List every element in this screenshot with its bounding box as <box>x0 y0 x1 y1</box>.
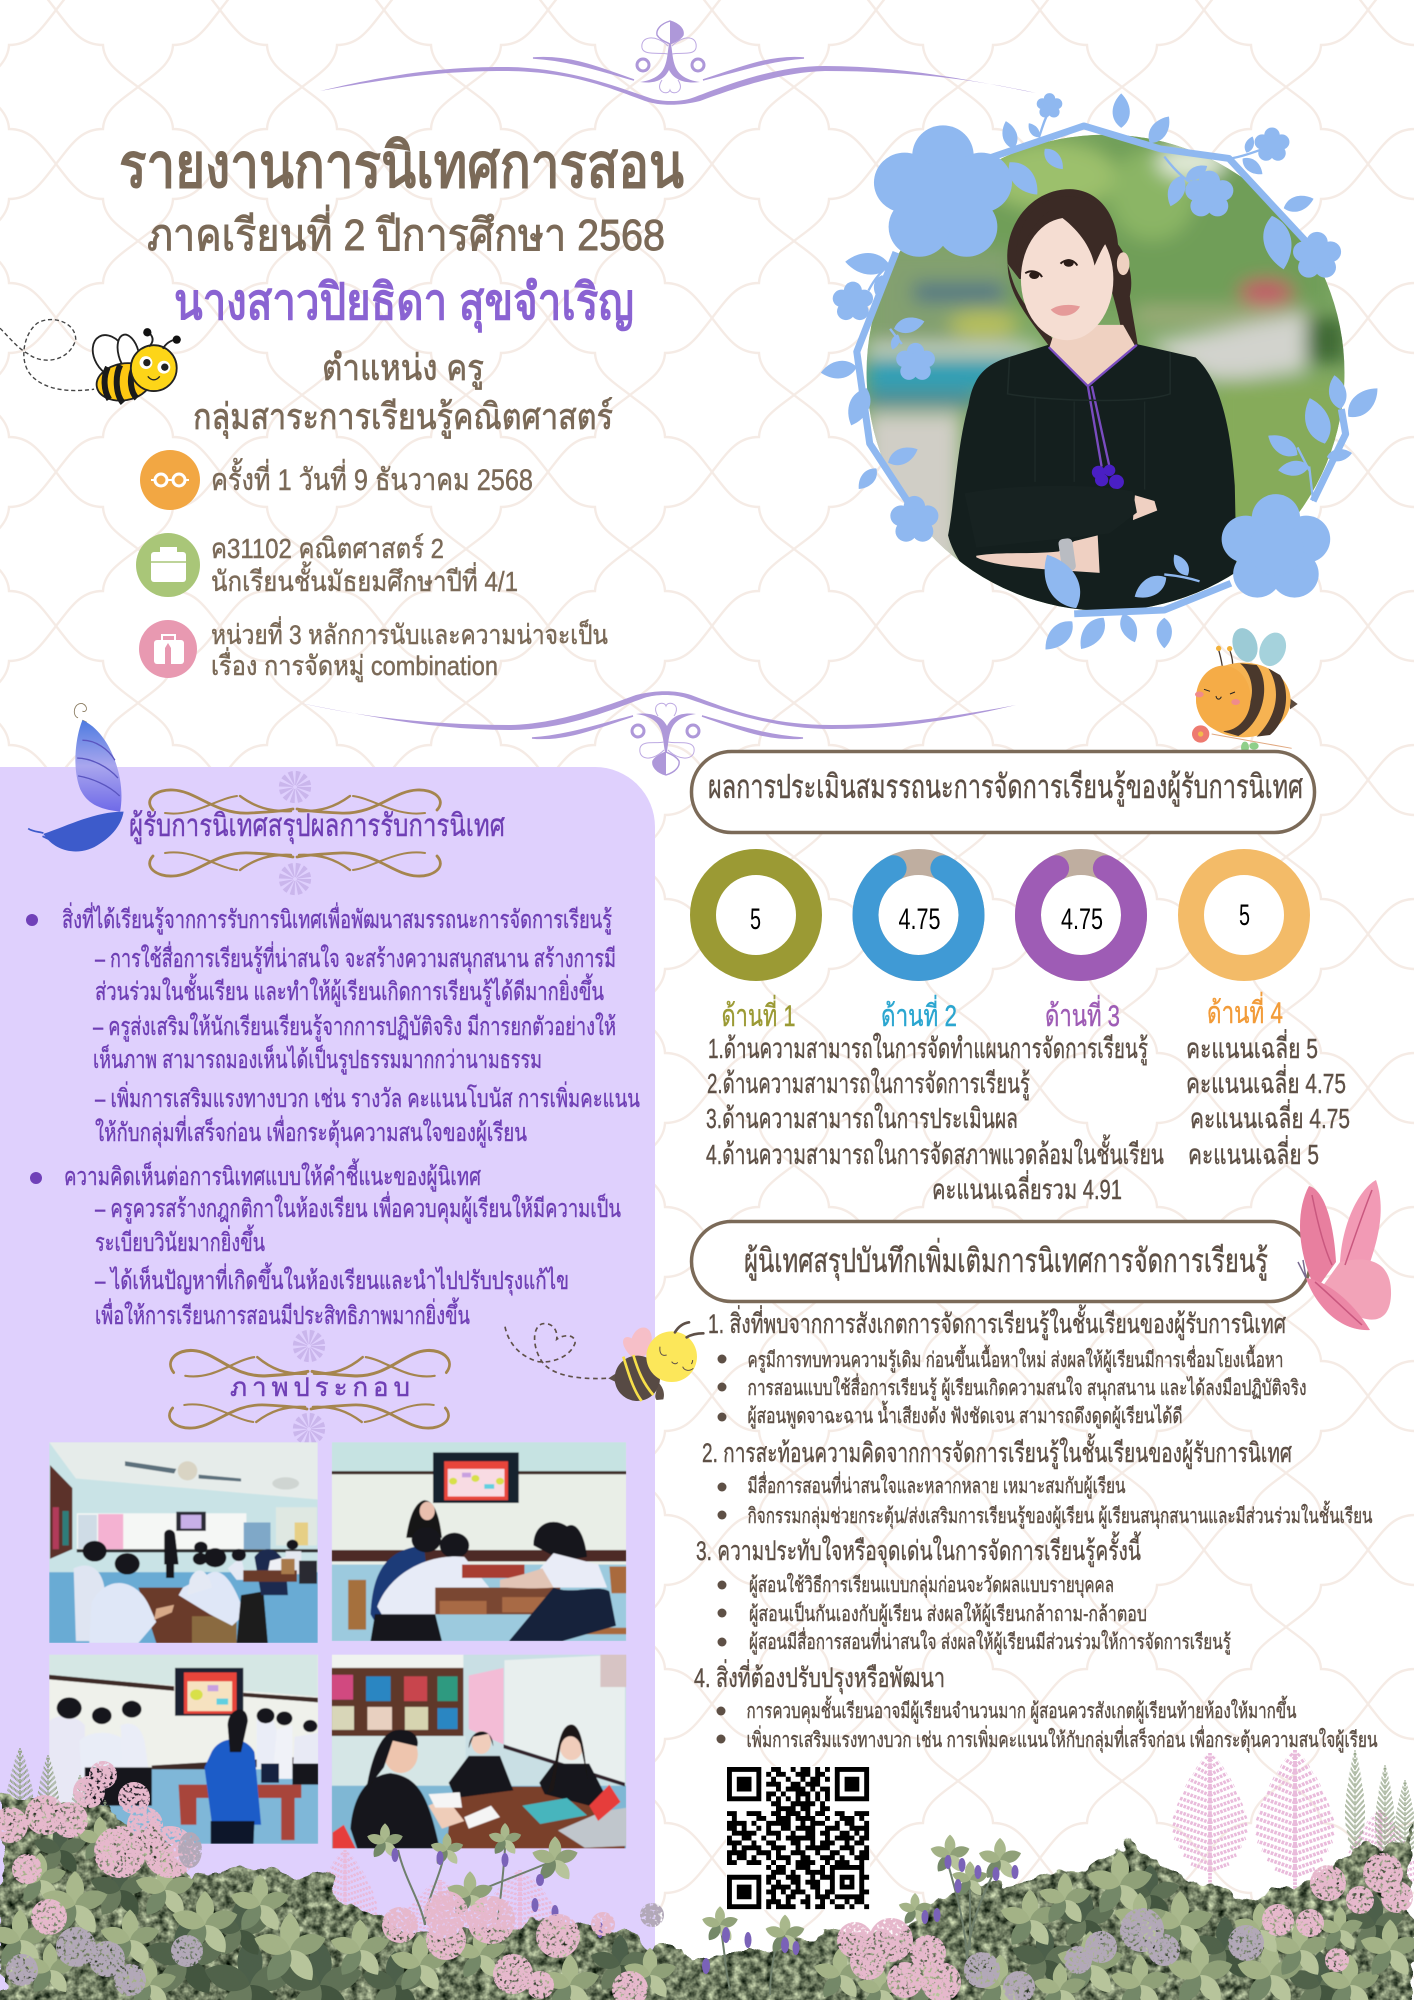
donut 3: 4.75 <box>1061 903 1103 936</box>
yellow bee <box>608 1322 703 1407</box>
photo 3: students at board <box>49 1654 318 1844</box>
note group 1 <box>708 1304 1306 1429</box>
top ornament <box>320 21 1036 105</box>
unit details: หน่วยที่ 3 หลักการนับและความน่าจะเป็น <box>211 616 608 650</box>
photo heading ornament top <box>170 1337 450 1376</box>
heading ornament top <box>150 778 440 814</box>
pink flower clusters <box>0 1761 1413 2000</box>
score list: 4.ด้านความสามารถในการจัดสภาพแวดล้อมในชั้นเรียน <box>706 1134 1164 1170</box>
donut labels: ด้านที่ 4 <box>1207 992 1283 1030</box>
score list: 3.ด้านความสามารถในการประเมินผล <box>706 1102 1018 1134</box>
bullet: supervision opinions: ความคิดเห็นต่อการนิเทศแบบให้คำชี้แนะของผู้นิเทศ <box>64 1158 481 1192</box>
grey flower clusters <box>6 1832 1264 2000</box>
note group 3: ผู้สอนเป็นกันเองกับผู้เรียน ส่งผลให้ผู้เรียนกล้าถาม-กล้าตอบ <box>749 1600 1147 1627</box>
donut 1: 5 <box>750 903 761 936</box>
foliage mass <box>0 1790 1414 2000</box>
bullet: supervision opinions: เพื่อให้การเรียนการสอนมีประสิทธิภาพมากยิ่งขึ้น <box>95 1297 470 1330</box>
score list <box>706 1029 1350 1205</box>
portrait photo with floral frame <box>819 93 1385 656</box>
panel background <box>0 767 655 2000</box>
note group 4: 4. สิ่งที่ต้องปรับปรุงหรือพัฒนา <box>694 1659 945 1695</box>
bullet: learned points: เห็นภาพ สามารถมองเห็นได้เป็นรูปธรรมมากกว่านามธรรม <box>93 1044 542 1075</box>
note group 4 <box>694 1659 1378 1753</box>
score list: คะแนนเฉลี่ย 4.75 <box>1186 1064 1346 1099</box>
score list: 1.ด้านความสามารถในการจัดทำแผนการจัดการเรียนรู้ <box>708 1032 1148 1066</box>
donut 4 <box>1191 862 1297 968</box>
icon: suitcase <box>139 620 197 678</box>
icon: glasses <box>140 450 200 510</box>
score list: คะแนนเฉลี่ย 4.75 <box>1190 1099 1350 1134</box>
astilbe plumes <box>313 1750 1414 1964</box>
bullet: learned points: ส่วนร่วมในชั้นเรียน และทำให้ผู้เรียนเกิดการเรียนรู้ได้ดีมากยิ่งขึ้น <box>95 973 604 1007</box>
portrait photo <box>859 130 1352 620</box>
panel: supervisee summary <box>0 703 655 2000</box>
bullet: learned points: – การใช้สื่อการเรียนรู้ที่น่าสนใจ จะสร้างความสนุกสนาน สร้างการมี <box>95 941 616 974</box>
note group 2 <box>702 1433 1372 1529</box>
donut 4: 5 <box>1239 899 1250 932</box>
panel heading: ผู้รับการนิเทศสรุปผลการรับการนิเทศ <box>129 808 505 845</box>
section: competency results <box>692 752 1350 1205</box>
bullet: learned points <box>26 902 640 1148</box>
pink butterfly <box>1298 1180 1391 1330</box>
course details: ค31102 คณิตศาสตร์ 2 <box>211 533 444 564</box>
bullet: supervision opinions: – ครูควรสร้างกฎกติกาในห้องเรียน เพื่อควบคุมผู้เรียนให้มีความเป็น <box>95 1191 621 1224</box>
photo heading: ภาพประกอบ <box>230 1372 410 1402</box>
donut labels: ด้านที่ 2 <box>881 995 957 1033</box>
unit details: เรื่อง การจัดหมู่ combination <box>211 647 498 682</box>
bottom ornament <box>300 691 1016 775</box>
dark leaf rosettes <box>32 1823 1407 2000</box>
pill heading: notes <box>692 1222 1310 1302</box>
donut labels: ด้านที่ 3 <box>1045 995 1120 1033</box>
heading ornament bottom <box>150 852 440 888</box>
photo gallery <box>49 1442 627 1849</box>
note group 2: มีสื่อการสอนที่น่าสนใจและหลากหลาย เหมาะสมกับผู้เรียน <box>748 1471 1126 1499</box>
visit details list <box>136 450 608 682</box>
note group 3: ผู้สอนใช้วิธีการเรียนแบบกลุ่มก่อนจะวัดผลแบบรายบุคคล <box>749 1573 1114 1598</box>
photo 1: classroom <box>49 1442 318 1643</box>
pale leaf rosettes <box>0 1816 1414 2000</box>
section: supervisor notes <box>692 1222 1378 1753</box>
donut labels <box>722 992 1283 1033</box>
donut 2: 4.75 <box>898 903 940 936</box>
graduate figure <box>948 189 1237 616</box>
floral frame <box>819 93 1385 656</box>
donut 3 <box>1028 862 1134 968</box>
course details <box>211 533 518 597</box>
watercolor bee <box>1192 625 1298 753</box>
note group 3: ผู้สอนมีสื่อการสอนที่น่าสนใจ ส่งผลให้ผู้เรียนมีส่วนร่วมให้การจัดการเรียนรู้ <box>749 1627 1231 1655</box>
pill heading: results <box>692 752 1314 832</box>
donut 1 <box>703 862 809 968</box>
foliage border <box>0 1748 1414 2000</box>
visit date: ครั้งที่ 1 วันที่ 9 ธันวาคม 2568 <box>211 458 533 497</box>
blue butterfly <box>28 703 124 851</box>
note group 3: 3. ความประทับใจหรือจุดเด่นในการจัดการเรียนรู้ครั้งนี้ <box>696 1531 1141 1568</box>
bullet: supervision opinions <box>30 1158 621 1330</box>
score list: คะแนนเฉลี่ย 5 <box>1188 1135 1319 1170</box>
score list: คะแนนเฉลี่ย 5 <box>1186 1029 1318 1064</box>
bullet: supervision opinions: – ได้เห็นปัญหาที่เกิดขึ้นในห้องเรียนและนำไปปรับปรุงแก้ไข <box>95 1262 569 1296</box>
bullet: supervision opinions: ระเบียบวินัยมากยิ่งขึ้น <box>95 1224 265 1257</box>
purple bud stems <box>366 1823 1023 1995</box>
bullet: learned points: ให้กับกลุ่มที่เสร็จก่อน เพื่อกระตุ้นความสนใจของผู้เรียน <box>95 1115 527 1148</box>
unit details <box>211 616 608 682</box>
icon: bag <box>136 533 200 597</box>
donut 2 <box>866 862 972 968</box>
teacher name: นางสาวปิยธิดา สุขจำเริญ <box>174 274 634 333</box>
subject group: กลุ่มสาระการเรียนรู้คณิตศาสตร์ <box>193 396 613 439</box>
bullet: learned points: – ครูส่งเสริมให้นักเรียนเรียนรู้จากการปฏิบัติจริง มีการยกตัวอย่างให้ <box>93 1012 616 1042</box>
note group 1: ผู้สอนพูดจาฉะฉาน น้ำเสียงดัง ฟังชัดเจน สามารถดึงดูดผู้เรียนได้ดี <box>748 1401 1182 1429</box>
bullet: learned points: สิ่งที่ได้เรียนรู้จากการรับการนิเทศเพื่อพัฒนาสมรรถนะการจัดการเรียนรู้ <box>62 902 612 935</box>
photo heading ornament bottom <box>169 1404 449 1438</box>
bee with dashed flight path <box>0 320 181 405</box>
position: ตำแหน่ง ครู <box>322 347 484 390</box>
grey-green spikes <box>6 1748 1414 1881</box>
bullet: learned points: – เพิ่มการเสริมแรงทางบวก เช่น รางวัล คะแนนโบนัส การเพิ่มคะแนน <box>95 1081 640 1113</box>
photo 2: group work <box>332 1442 626 1641</box>
QR code <box>726 1766 870 1910</box>
donut labels: ด้านที่ 1 <box>722 995 796 1033</box>
score list: คะแนนเฉลี่ยรวม 4.91 <box>932 1170 1122 1205</box>
title block <box>119 132 684 439</box>
title: รายงานการนิเทศการสอน <box>119 132 684 201</box>
photo 4: teachers meeting <box>332 1654 627 1849</box>
dashed heart path <box>505 1324 607 1379</box>
note group 3 <box>696 1531 1231 1655</box>
score list: 2.ด้านความสามารถในการจัดการเรียนรู้ <box>707 1067 1030 1101</box>
course details: นักเรียนชั้นมัธยมศึกษาปีที่ 4/1 <box>211 561 518 597</box>
subtitle: ภาคเรียนที่ 2 ปีการศึกษา 2568 <box>147 204 665 260</box>
